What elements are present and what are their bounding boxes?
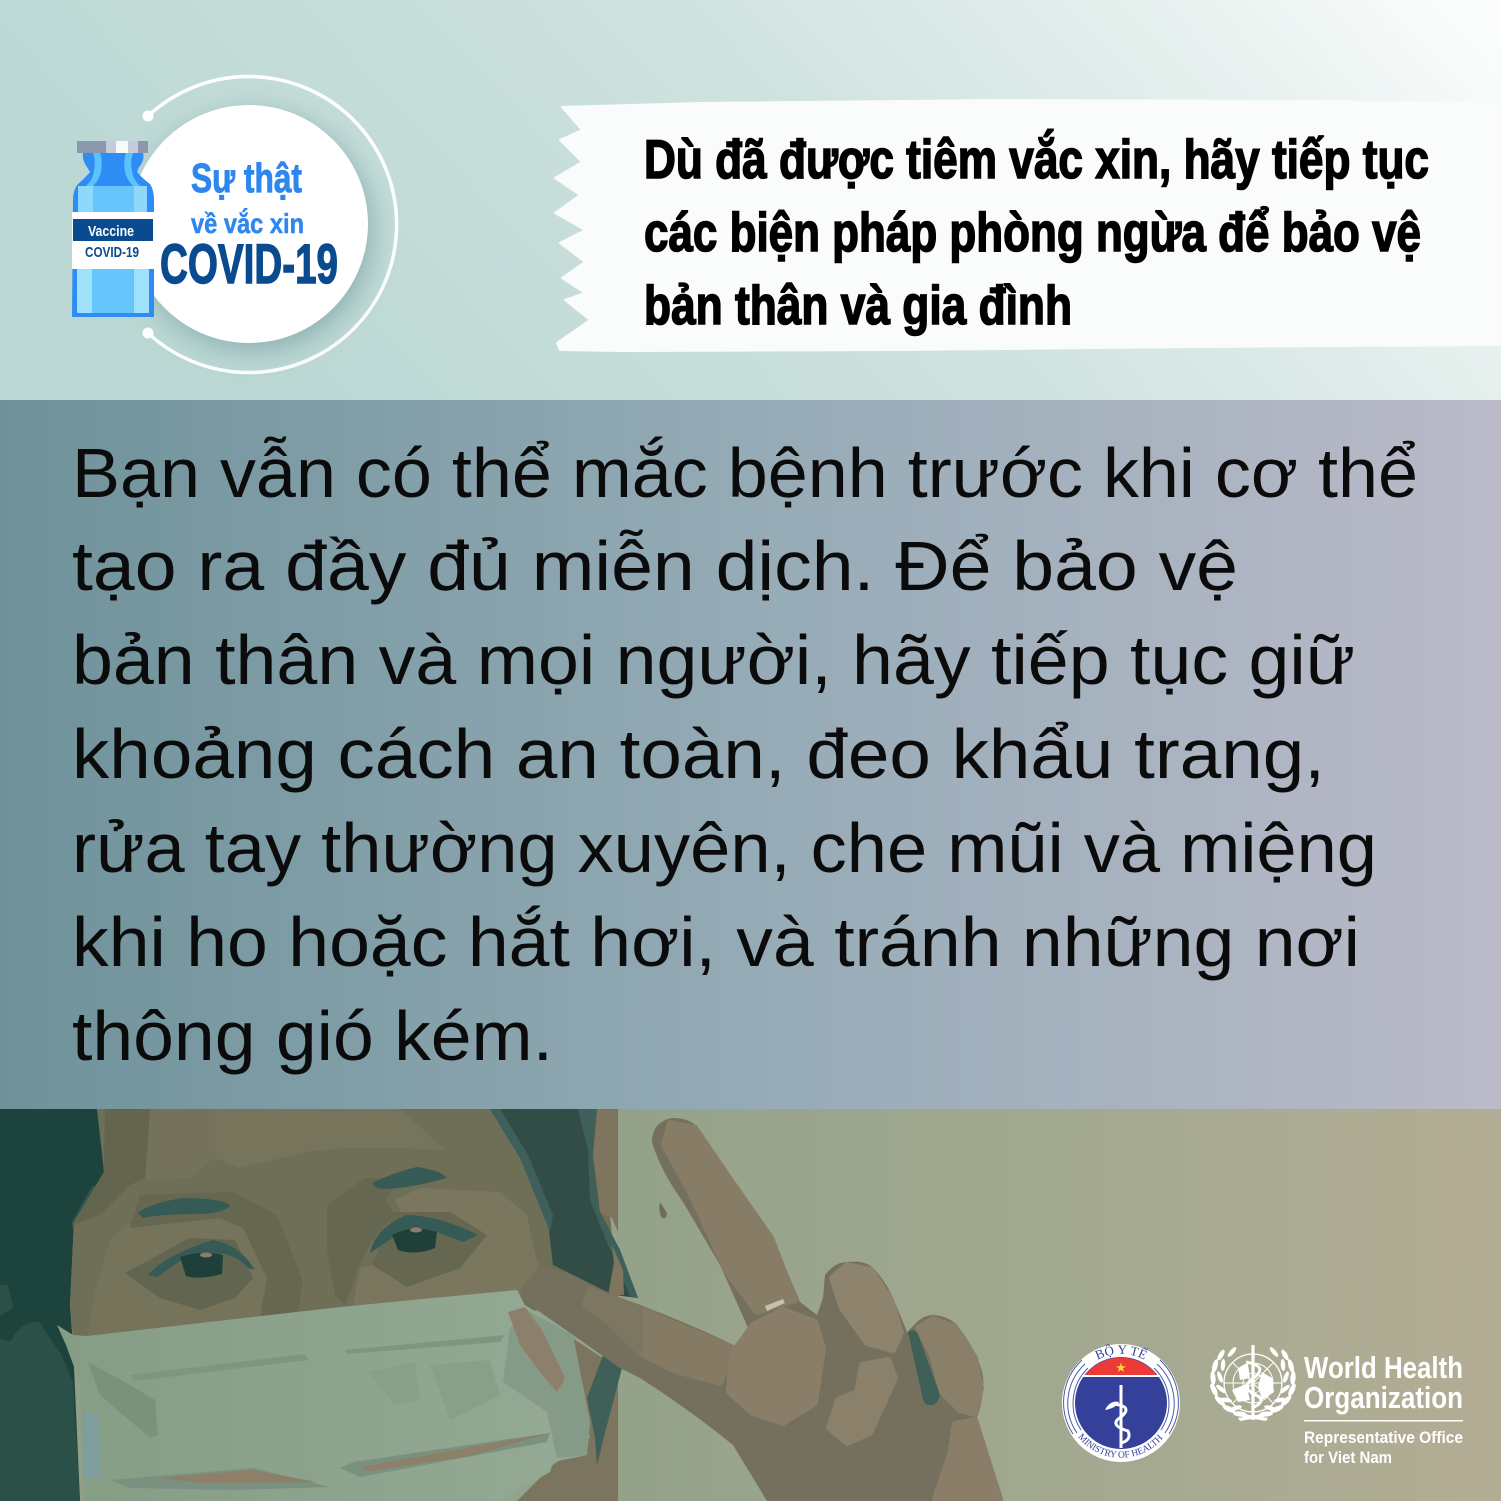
- logo: Ministry of Health: [1062, 1344, 1180, 1462]
- brow-bone shadows: [130, 1192, 303, 1318]
- panel: torn paper heading: [555, 100, 1501, 351]
- neck and lower strip: [517, 1330, 618, 1501]
- hair left: [0, 1109, 104, 1501]
- logo: Ministry of Health: BỘ Y TẾ: [1094, 1344, 1148, 1360]
- badge disc: [130, 105, 368, 343]
- header background: [0, 0, 1501, 400]
- badge title: về vắc xin: [191, 208, 304, 239]
- mask side highlight: [83, 1413, 100, 1478]
- WHO emblem: [1209, 1345, 1297, 1421]
- body text: Bạn vẫn có thể mắc bệnh trước khi cơ thể: [72, 434, 1418, 512]
- hand light tones: [585, 1123, 1000, 1499]
- mask: [57, 1290, 590, 1501]
- icon: vaccine vial: Vaccine: [88, 223, 134, 240]
- eye sockets: [125, 1238, 253, 1310]
- heading text: bản thân và gia đình: [644, 274, 1072, 336]
- eye right: [370, 1215, 478, 1253]
- WHO text: Organization: [1304, 1380, 1463, 1415]
- body text: [72, 434, 1418, 1075]
- badge title: COVID-19: [160, 232, 338, 295]
- logo: Ministry of Health: ★: [1115, 1360, 1127, 1375]
- badge: vaccine facts: [72, 77, 397, 373]
- hand: [520, 1118, 1003, 1501]
- WHO text: for Viet Nam: [1304, 1448, 1392, 1467]
- badge ring: [148, 77, 397, 373]
- badge title: [160, 155, 338, 295]
- body text: khi ho hoặc hắt hơi, và tránh những nơi: [72, 903, 1360, 981]
- mask folds: [130, 1335, 505, 1381]
- eye left: [148, 1240, 255, 1278]
- body text: thông gió kém.: [72, 997, 553, 1075]
- WHO text: Representative Office: [1304, 1428, 1463, 1447]
- icon: vaccine vial: [72, 141, 154, 317]
- tan hair-side strip: [593, 1109, 618, 1232]
- WHO text: World Health: [1304, 1350, 1463, 1385]
- hair right: [490, 1109, 638, 1298]
- face right light tones: [352, 1188, 555, 1310]
- body text: rửa tay thường xuyên, che mũi và miệng: [72, 809, 1377, 887]
- body text: khoảng cách an toàn, đeo khẩu trang,: [72, 715, 1325, 793]
- body text: bản thân và mọi người, hãy tiếp tục giữ: [72, 621, 1355, 699]
- mask mouth creases: [340, 1433, 550, 1477]
- eyebrows: [138, 1198, 230, 1218]
- face: [70, 1109, 618, 1340]
- body text: tạo ra đầy đủ miễn dịch. Để bảo vệ: [72, 527, 1238, 605]
- mask side: [503, 1312, 590, 1458]
- hand finger stripe: [908, 1330, 940, 1405]
- logo: Ministry of Health: MINISTRY OF HEALTH: [1078, 1433, 1163, 1458]
- illustration: masked woman and hand: [0, 1109, 1501, 1501]
- icon: vaccine vial: COVID-19: [85, 244, 139, 261]
- torn paper shape: [555, 100, 1501, 351]
- wall background: [0, 1109, 1501, 1501]
- panel: message band: [0, 400, 1501, 1109]
- badge title: Sự thật: [191, 155, 302, 201]
- WHO text: [1304, 1350, 1463, 1467]
- heading text: [644, 128, 1429, 336]
- forehead light tones: [215, 1109, 445, 1168]
- logo: World Health Organization: [1209, 1345, 1463, 1467]
